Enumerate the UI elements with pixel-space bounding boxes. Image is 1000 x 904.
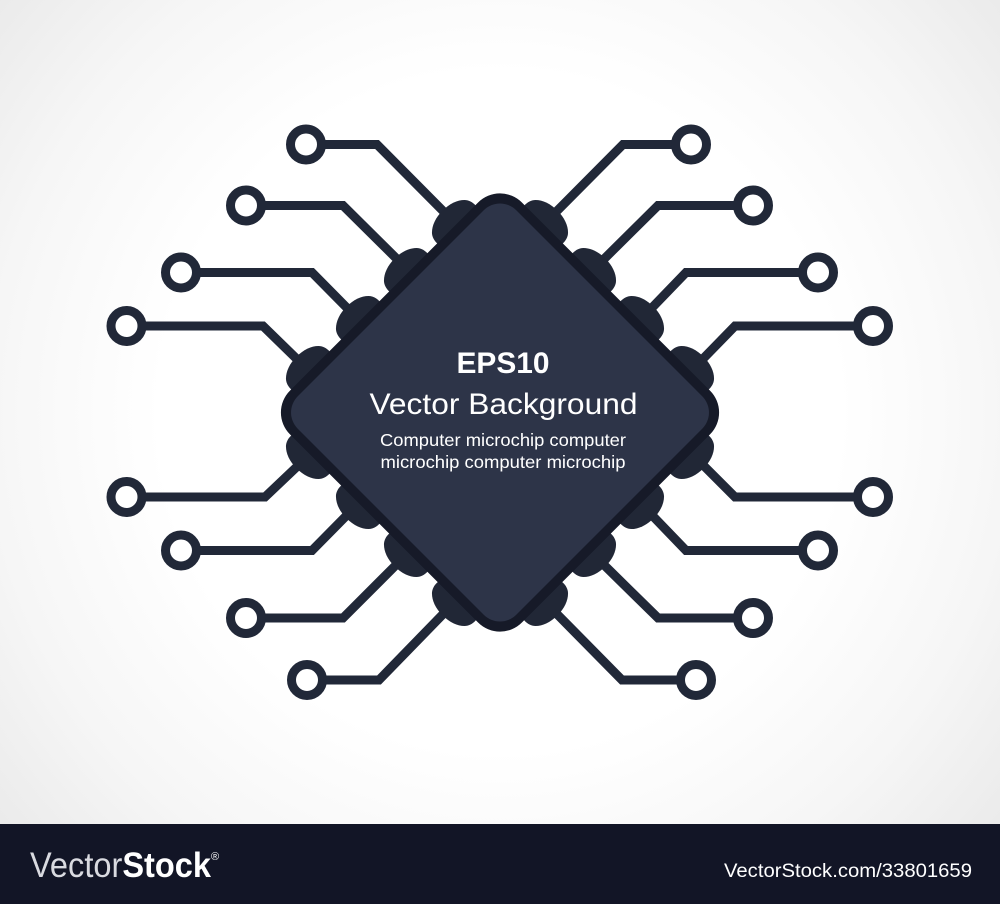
footer image id: VectorStock.com/33801659 bbox=[724, 860, 972, 882]
chip face bbox=[282, 194, 718, 631]
footer bar bbox=[0, 824, 1000, 904]
registered mark: ® bbox=[211, 851, 219, 863]
chip heading: EPS10 bbox=[456, 347, 550, 380]
chip subtitle: Vector Background bbox=[370, 388, 638, 421]
circuit traces bbox=[142, 144, 858, 680]
chip outer border bbox=[268, 181, 732, 644]
chip description bbox=[380, 430, 626, 472]
chip description: Computer microchip computer bbox=[380, 430, 626, 450]
chip description: microchip computer microchip bbox=[380, 452, 626, 472]
circuit end rings bbox=[111, 129, 888, 696]
footer logo: VectorStock bbox=[30, 846, 211, 885]
solder pads bbox=[277, 191, 723, 635]
